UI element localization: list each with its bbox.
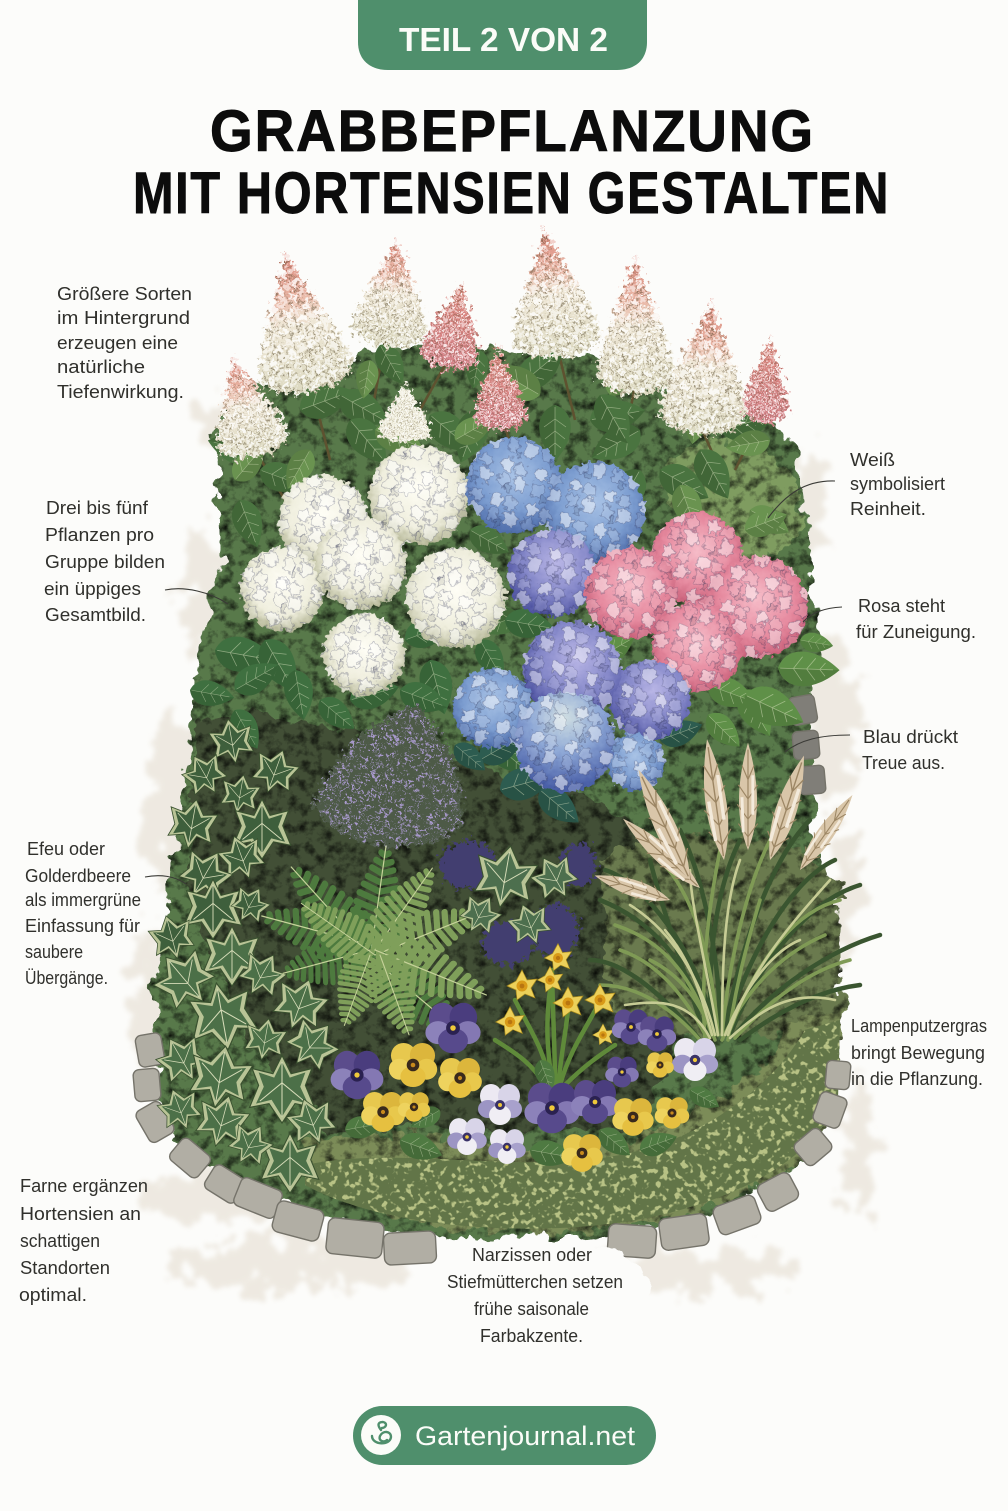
blue hydrangea group — [466, 437, 645, 617]
annotation: ivy: saubere — [25, 941, 83, 962]
annotation: pink: Rosa steht — [858, 595, 945, 616]
pampas plumes — [592, 737, 861, 909]
annotation: blue: Treue aus. — [862, 752, 945, 773]
purple and ivy patch — [440, 841, 596, 965]
watercolor wash behind garden — [130, 400, 874, 1292]
annotation: blue — [862, 726, 958, 773]
annotation: background varieties: erzeugen eine — [57, 332, 178, 353]
annotation: white — [850, 449, 945, 519]
footer brand pill: Gartenjournal.net — [415, 1421, 636, 1451]
panicle stems — [255, 340, 760, 500]
annotation: pink: für Zuneigung. — [856, 621, 976, 642]
annotation: daffodils and pansies: Narzissen oder — [472, 1244, 592, 1265]
annotation: background varieties — [57, 283, 192, 402]
title: GRABBEPFLANZUNG — [210, 99, 815, 164]
annotation: white: symbolisiert — [850, 473, 945, 494]
annotation: ivy: Efeu oder — [27, 838, 105, 859]
annotation: fountain grass: bringt Bewegung — [851, 1042, 985, 1063]
title — [133, 99, 890, 226]
annotation: background varieties: Tiefenwirkung. — [57, 381, 184, 402]
airy lavender plant — [312, 705, 463, 847]
annotation: daffodils and pansies — [447, 1244, 623, 1346]
top banner: TEIL 2 VON 2 — [399, 21, 608, 58]
icon: logo sprout — [361, 1415, 401, 1455]
annotation: ferns: optimal. — [19, 1284, 87, 1305]
pansy foliage — [343, 1057, 724, 1170]
background leaves — [188, 337, 840, 833]
panel: garden bed — [133, 224, 880, 1360]
annotation: daffodils and pansies: Stiefmütterchen setzen — [447, 1271, 623, 1292]
annotation: pink — [856, 595, 976, 642]
annotation: planting groups: Gesamtbild. — [45, 604, 146, 625]
annotation: white: Reinheit. — [850, 498, 926, 519]
ornamental grass — [590, 820, 880, 1040]
ivy border — [145, 716, 347, 1193]
daffodils — [495, 944, 615, 1085]
annotation: planting groups: Drei bis fünf — [46, 497, 149, 518]
annotation: ferns: Farne ergänzen — [20, 1175, 148, 1196]
annotation: ivy: Übergänge. — [25, 967, 108, 988]
annotation: white: Weiß — [850, 449, 895, 470]
pansies — [331, 1003, 718, 1172]
annotation: planting groups: ein üppiges — [44, 578, 141, 599]
annotation: background varieties: Größere Sorten — [57, 283, 192, 304]
annotation: ferns: schattigen — [20, 1230, 100, 1251]
annotation: ferns — [19, 1175, 148, 1305]
purple-blue hydrangea group — [453, 621, 690, 792]
annotation: ferns: Standorten — [20, 1257, 110, 1278]
ground cover — [305, 1020, 840, 1229]
pink hydrangea group — [585, 512, 808, 692]
annotation: fountain grass — [851, 1015, 987, 1089]
annotation: background varieties: im Hintergrund — [57, 307, 190, 328]
fern — [256, 843, 495, 1051]
footer brand pill — [353, 1406, 656, 1465]
annotation: daffodils and pansies: frühe saisonale — [474, 1298, 589, 1319]
annotation: planting groups: Gruppe bilden — [45, 551, 165, 572]
annotation: ferns: Hortensien an — [20, 1203, 141, 1224]
white hydrangea group — [240, 445, 506, 696]
leader lines — [145, 481, 850, 884]
annotation: daffodils and pansies: Farbakzente. — [480, 1325, 583, 1346]
annotation: ivy: als immergrüne — [25, 889, 141, 910]
garden foliage base — [153, 348, 842, 1241]
white clearing at caption — [420, 1236, 650, 1360]
annotation: fountain grass: in die Pflanzung. — [851, 1068, 983, 1089]
annotation: ivy: Einfassung für — [25, 915, 140, 936]
annotation: planting groups — [44, 497, 165, 625]
panicle hydrangeas — [197, 224, 793, 465]
annotation: fountain grass: Lampenputzergras — [851, 1015, 987, 1036]
annotation: ivy: Golderdbeere — [25, 865, 131, 886]
annotation: ivy — [25, 838, 141, 988]
annotation: background varieties: natürliche — [57, 356, 145, 377]
stone border — [133, 694, 851, 1265]
annotation: blue: Blau drückt — [863, 726, 958, 747]
top banner — [358, 0, 647, 70]
annotation: planting groups: Pflanzen pro — [45, 524, 154, 545]
